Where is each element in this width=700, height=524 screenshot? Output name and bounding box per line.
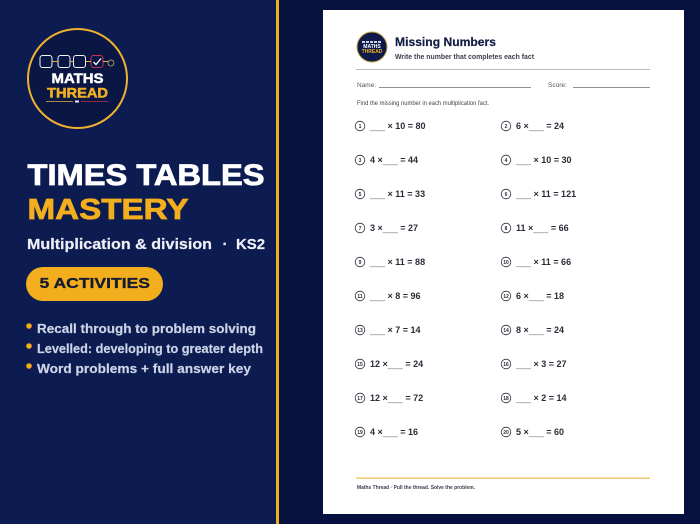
- question grid: 15: [357, 362, 363, 368]
- question grid: ___ × 8 = 96: [369, 291, 421, 301]
- question grid: 20: [503, 430, 509, 436]
- question grid: 2: [505, 124, 508, 130]
- footer rule: [356, 478, 650, 479]
- question grid: 19: [357, 430, 363, 436]
- question grid: 3 ×___ = 27: [370, 223, 418, 233]
- question grid: 8 ×___ = 24: [516, 325, 564, 335]
- bullet list: Word problems + full answer key: [37, 361, 252, 376]
- logo: Maths Thread badge: THREAD: [47, 84, 108, 100]
- worksheet logo: [357, 32, 387, 62]
- question grid: 7: [359, 226, 362, 232]
- panel: left navy cover: [0, 0, 279, 524]
- name and score fields: Score:: [548, 82, 567, 89]
- question grid: 16: [503, 362, 509, 368]
- question grid: ___ × 10 = 30: [515, 155, 572, 165]
- subtitle: ·: [222, 236, 228, 253]
- question grid: 1: [359, 124, 362, 130]
- header rule: [356, 69, 650, 70]
- logo: Maths Thread badge: MATHS: [52, 70, 104, 86]
- bullet list: Recall through to problem solving: [37, 321, 256, 336]
- question grid: 4 ×___ = 44: [370, 155, 418, 165]
- name and score fields: [357, 82, 650, 89]
- question grid: 9: [359, 260, 362, 266]
- question grid: 3: [359, 158, 362, 164]
- title: [28, 159, 264, 226]
- gold divider: [276, 0, 279, 524]
- subtitle: KS2: [236, 236, 265, 253]
- badge: 5 activities: 5 ACTIVITIES: [40, 275, 150, 292]
- question grid: 11 ×___ = 66: [516, 223, 569, 233]
- question grid: 6 ×___ = 18: [516, 291, 564, 301]
- question grid: 11: [357, 294, 363, 300]
- question grid: 6: [505, 192, 508, 198]
- question grid: 17: [357, 396, 363, 402]
- question grid: ___ × 11 = 88: [369, 257, 425, 267]
- subtitle: Multiplication & division: [27, 236, 212, 253]
- question grid: ___ × 10 = 80: [369, 121, 426, 131]
- question grid: 10: [503, 260, 509, 266]
- worksheet subtitle: Write the number that completes each fact: [395, 52, 534, 61]
- worksheet logo: THREAD: [362, 49, 383, 55]
- title: TIMES TABLES: [28, 159, 264, 192]
- title: MASTERY: [28, 194, 188, 226]
- question grid: 12: [503, 294, 509, 300]
- logo: Maths Thread badge: [28, 29, 127, 128]
- name and score fields: Name:: [357, 82, 376, 89]
- question grid: ___ × 2 = 14: [515, 393, 567, 403]
- question grid: [355, 121, 576, 437]
- question grid: 14: [503, 328, 509, 334]
- question grid: 18: [503, 396, 509, 402]
- question grid: ___ × 11 = 66: [515, 257, 571, 267]
- question grid: ___ × 11 = 33: [369, 189, 425, 199]
- question grid: 5 ×___ = 60: [516, 427, 564, 437]
- footer text: Maths Thread · Pull the thread. Solve the problem.: [357, 485, 476, 491]
- question grid: ___ × 11 = 121: [515, 189, 576, 199]
- question grid: 12 ×___ = 24: [370, 359, 423, 369]
- badge: 5 activities: [26, 267, 163, 301]
- question grid: ___ × 7 = 14: [369, 325, 421, 335]
- worksheet logo: MATHS: [363, 44, 381, 50]
- question grid: ___ × 3 = 27: [515, 359, 567, 369]
- panel: worksheet page: [323, 10, 684, 514]
- question grid: 6 ×___ = 24: [516, 121, 564, 131]
- question grid: 13: [357, 328, 363, 334]
- question grid: 4: [505, 158, 508, 164]
- bullet list: [26, 321, 263, 376]
- question grid: 5: [359, 192, 362, 198]
- question grid: 8: [505, 226, 508, 232]
- question grid: 4 ×___ = 16: [370, 427, 418, 437]
- worksheet title: Missing Numbers: [395, 35, 496, 49]
- question grid: 12 ×___ = 72: [370, 393, 423, 403]
- bullet list: Levelled: developing to greater depth: [37, 341, 263, 356]
- instruction: Find the missing number in each multiplication fact.: [357, 100, 489, 107]
